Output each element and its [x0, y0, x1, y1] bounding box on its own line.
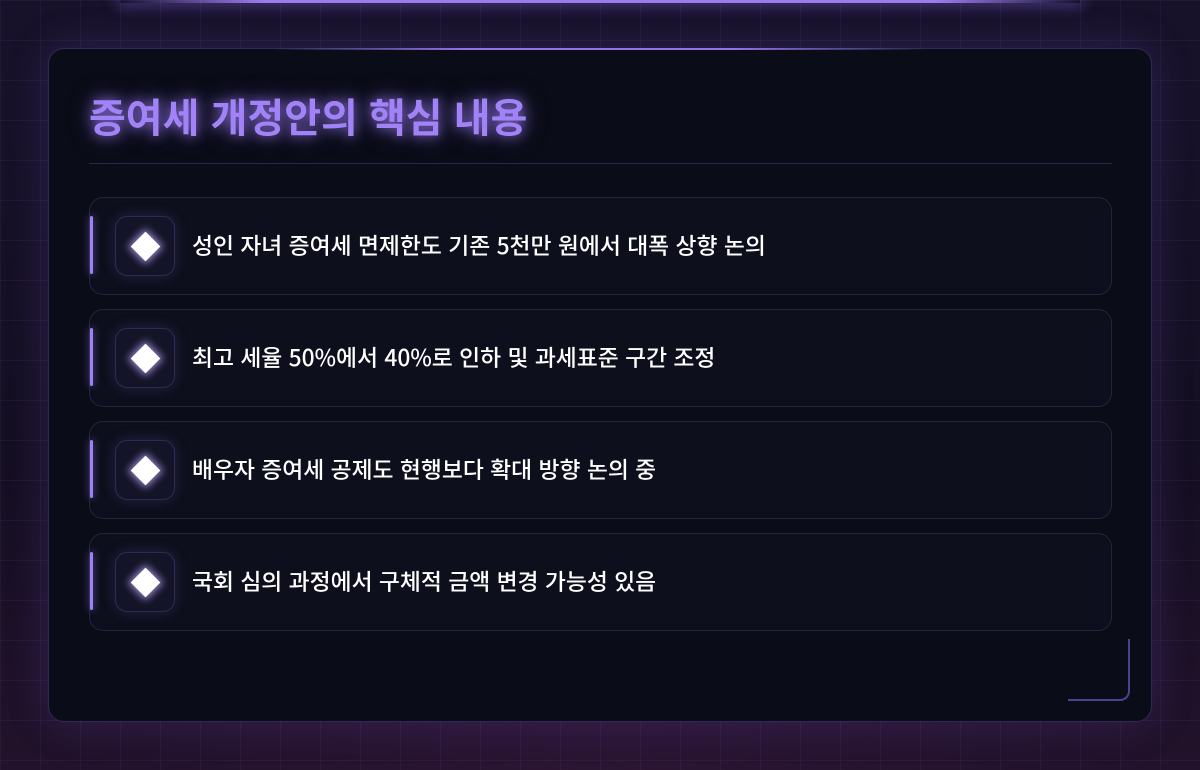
icon: diamond	[115, 216, 175, 276]
item 4	[89, 533, 1112, 631]
decorative corner bracket	[1068, 639, 1130, 701]
icon: diamond	[115, 328, 175, 388]
item 3	[89, 421, 1112, 519]
text: item 1: 성인 자녀 증여세 면제한도 기존 5천만 원에서 대폭 상향 논의	[192, 228, 766, 261]
icon: diamond	[115, 440, 175, 500]
icon: diamond	[115, 552, 175, 612]
text: item 3: 배우자 증여세 공제도 현행보다 확대 방향 논의 중	[192, 452, 656, 485]
text: item 2: 최고 세율 50%에서 40%로 인하 및 과세표준 구간 조정	[192, 340, 715, 373]
item 1	[89, 197, 1112, 295]
title: 증여세 개정안의 핵심 내용	[89, 86, 527, 144]
item 2	[89, 309, 1112, 407]
text: item 4: 국회 심의 과정에서 구체적 금액 변경 가능성 있음	[192, 564, 656, 597]
